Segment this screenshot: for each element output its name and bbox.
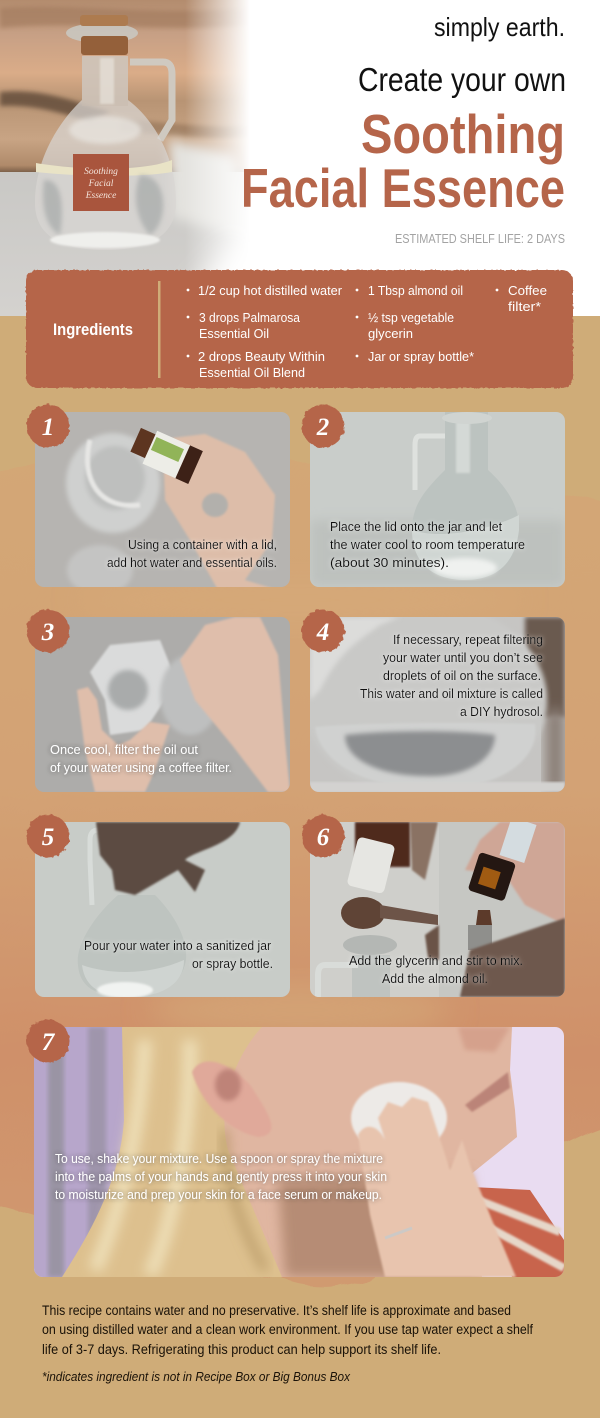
bottle label: Soothing xyxy=(84,167,118,177)
step 5 caption: or spray bottle. xyxy=(192,956,273,971)
ingredients list column 2: glycerin xyxy=(368,326,413,341)
ingredients list column 3: Coffee xyxy=(508,283,547,298)
footer note xyxy=(42,1303,533,1357)
blonde hair xyxy=(62,1027,282,1277)
ear xyxy=(192,1061,271,1137)
bottle lip and cork xyxy=(66,23,138,43)
step 7 caption xyxy=(55,1151,387,1202)
step 4 caption: If necessary, repeat filtering xyxy=(393,632,543,647)
footnote: *indicates ingredient is not in Recipe Box or Big Bonus Box xyxy=(42,1370,351,1384)
face and neck xyxy=(224,1027,517,1277)
step 6 caption: Add the glycerin and stir to mix. xyxy=(349,953,523,968)
step 7 card xyxy=(26,1020,564,1277)
ingredients list column 2: 1 Tbsp almond oil xyxy=(368,283,463,298)
step 5 number badge xyxy=(26,814,70,858)
cotton pad xyxy=(350,1080,448,1138)
step 6 number badge xyxy=(302,814,344,858)
title xyxy=(241,61,566,219)
step 7 photo xyxy=(34,1027,564,1277)
shelf life note: ESTIMATED SHELF LIFE: 2 DAYS xyxy=(395,232,565,246)
step 4 photo xyxy=(310,617,565,792)
bottle label: Essence xyxy=(85,191,116,201)
step 6 number badge: 6 xyxy=(317,824,330,851)
title: Create your own xyxy=(358,61,566,98)
panel: ingredients xyxy=(26,270,573,388)
step 5 number badge: 5 xyxy=(42,824,54,851)
step 6 caption xyxy=(349,953,523,986)
ingredients list column 2: Jar or spray bottle* xyxy=(368,349,474,364)
step 6 card xyxy=(302,814,565,997)
step 3 card xyxy=(26,610,290,792)
ingredients list column 1: Essential Oil xyxy=(199,326,269,341)
step 5 photo xyxy=(35,822,290,998)
step 2 number badge xyxy=(302,404,344,448)
footer note: life of 3-7 days. Refrigerating this product can help support its shelf life. xyxy=(42,1342,441,1357)
step 3 caption: Once cool, filter the oil out xyxy=(50,742,198,757)
step 6 caption: Add the almond oil. xyxy=(382,971,488,986)
step 1 caption xyxy=(107,537,277,570)
step 4 caption: This water and oil mixture is called xyxy=(360,686,543,701)
step 5 card xyxy=(26,814,290,998)
step 1 number badge: 1 xyxy=(42,414,54,441)
step 3 number badge: 3 xyxy=(41,619,54,646)
striped shirt xyxy=(472,1187,564,1277)
step 2 number badge: 2 xyxy=(316,414,329,441)
bottle body xyxy=(35,56,176,250)
step 4 caption: your water until you don’t see xyxy=(383,650,543,665)
nose and lips shading xyxy=(458,1027,510,1052)
step 1 photo xyxy=(35,412,290,595)
step 3 photo xyxy=(35,617,290,792)
ingredients heading: Ingredients xyxy=(53,321,133,339)
logo: simply earth: simply earth. xyxy=(434,12,565,42)
step 4 caption xyxy=(360,632,543,719)
ingredients list column 1: 2 drops Beauty Within xyxy=(198,349,325,364)
step 7 caption: into the palms of your hands and gently press it into your skin xyxy=(55,1169,387,1184)
step 7 number badge: 7 xyxy=(42,1029,56,1056)
ingredients list column 3: filter* xyxy=(508,299,541,314)
bottle handle xyxy=(130,62,172,140)
title: Soothing xyxy=(361,103,565,165)
bottle label: Facial xyxy=(88,179,114,189)
step 2 caption: Place the lid onto the jar and let xyxy=(330,519,502,534)
ingredients list column 1: 1/2 cup hot distilled water xyxy=(198,283,343,298)
step 2 card xyxy=(302,404,565,587)
step 3 number badge xyxy=(26,610,70,652)
ingredients list column 3 xyxy=(496,283,547,314)
step 5 caption: Pour your water into a sanitized jar xyxy=(84,938,272,953)
step 3 caption xyxy=(50,742,232,775)
step 5 caption xyxy=(84,938,273,971)
footer note: This recipe contains water and no preservative. It’s shelf life is approximate and based xyxy=(42,1303,511,1318)
step 4 caption: a DIY hydrosol. xyxy=(460,704,543,719)
ingredients list column 2 xyxy=(356,283,474,364)
step 2 caption: (about 30 minutes). xyxy=(330,555,449,570)
step 7 caption: To use, shake your mixture. Use a spoon or spray the mixture xyxy=(55,1151,383,1166)
step 2 caption: the water cool to room temperature xyxy=(330,537,525,552)
ingredients list column 1: Essential Oil Blend xyxy=(199,365,305,380)
hand xyxy=(358,1097,516,1277)
step 7 caption: to moisturize and prep your skin for a face serum or makeup. xyxy=(55,1187,382,1202)
bottle label xyxy=(73,154,129,211)
cloth xyxy=(168,138,255,240)
step 1 number badge xyxy=(26,404,70,448)
step 7 number badge xyxy=(26,1020,70,1062)
ingredients list column 1: 3 drops Palmarosa xyxy=(199,310,301,325)
step 4 number badge xyxy=(302,610,344,652)
step 4 number badge: 4 xyxy=(316,619,329,646)
step 1 caption: add hot water and essential oils. xyxy=(107,555,277,570)
step 6 photo xyxy=(310,817,565,997)
step 1 caption: Using a container with a lid, xyxy=(128,537,277,552)
hero photo: glass bottle xyxy=(0,0,320,366)
step 4 card xyxy=(302,602,565,798)
footer note: on using distilled water and a clean work environment. If you use tap water expect a shelf xyxy=(42,1322,533,1337)
ingredients list column 2: ½ tsp vegetable xyxy=(368,310,454,325)
step 2 caption xyxy=(330,519,525,570)
step 3 caption: of your water using a coffee filter. xyxy=(50,760,232,775)
step 4 caption: droplets of oil on the surface. xyxy=(383,668,541,683)
ingredients list column 1 xyxy=(187,283,343,380)
step 1 card xyxy=(26,404,290,595)
step 2 photo xyxy=(310,410,565,587)
